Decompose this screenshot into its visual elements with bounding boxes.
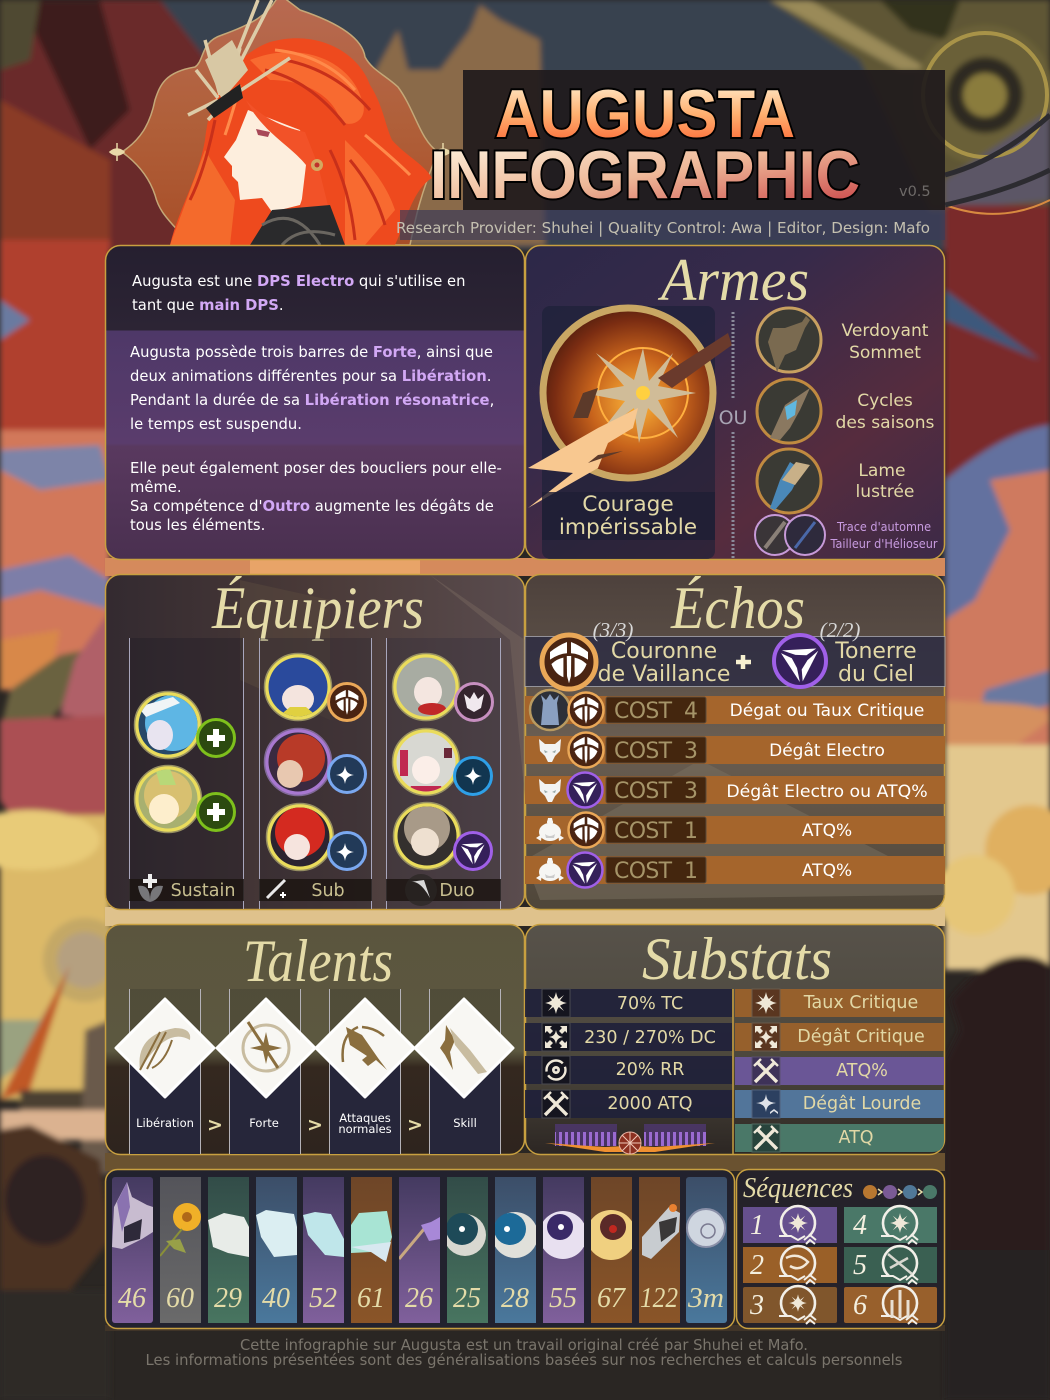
intro paragraph 2: deux animations différentes pour sa Libération. (130, 368, 491, 385)
echo row: cost 3 electro or atk: COST 3 (614, 779, 698, 804)
character portrait with support badge (264, 728, 366, 796)
priority: ATQ: ATQ (838, 1128, 874, 1148)
title line: INFOGRAPHIC: INFOGRAPHIC (430, 137, 860, 213)
material: 52 (303, 1177, 344, 1323)
character portrait with shield badge (264, 654, 366, 720)
weapon option: Verdoyant Sommet: Sommet (849, 343, 921, 363)
talent priority columns (129, 989, 500, 1154)
priority: Dégât Lourde (735, 1090, 944, 1118)
sequence 3 (743, 1286, 837, 1324)
priority: ATQ (735, 1124, 944, 1152)
heading: Armes: Armes (657, 247, 809, 313)
set: Couronne de Vaillance: de Vaillance (598, 662, 730, 687)
heading: Échos: Échos (670, 575, 805, 641)
echo row: cost 3 electro: COST 3 (614, 739, 698, 764)
weapon options: low rarity pair: Trace d'automne (836, 519, 931, 534)
target: crit damage (525, 1023, 732, 1051)
weapon option: Verdoyant Sommet: Verdoyant (841, 321, 929, 341)
echo row: cost 1 shield: ATQ% (802, 821, 852, 841)
panel: weapons (526, 246, 944, 560)
label: Sub (259, 879, 372, 901)
material: 40 (256, 1177, 297, 1323)
character portrait with purple badge (394, 802, 492, 870)
material: 28 (495, 1177, 536, 1323)
panel: teammates (106, 574, 525, 910)
talent icon: Attaques normales: Attaques (339, 1111, 391, 1125)
material: 60 (160, 1177, 201, 1323)
echo set header (525, 618, 945, 689)
priority: Taux Critique: Taux Critique (803, 993, 918, 1013)
material: 67: 67 (597, 1283, 626, 1314)
material: 55 (543, 1177, 584, 1323)
weapon option: Verdoyant Sommet (757, 308, 929, 372)
weapon option: Lame lustrée: lustrée (856, 482, 914, 502)
talent icon: Skill (415, 999, 513, 1130)
intro paragraph 2: Pendant la durée de sa Libération résonatrice, (130, 392, 494, 409)
talent icon: Attaques normales (316, 999, 414, 1136)
material: 61 (351, 1177, 392, 1323)
echo row: cost 1 thunder: ATQ% (802, 861, 852, 881)
set: Couronne de Vaillance: (3/3) (593, 618, 633, 642)
arrow: > (407, 1114, 423, 1136)
material: 28: 28 (501, 1283, 529, 1314)
sequence 1 (743, 1206, 837, 1244)
intro paragraph 3: même. (130, 479, 182, 496)
priority: ATQ%: ATQ% (836, 1061, 888, 1081)
material: 55: 55 (549, 1283, 577, 1314)
set: Tonerre du Ciel: Tonerre (834, 639, 917, 664)
echo row: cost 1 shield (525, 812, 945, 848)
talent icon: Forte (217, 999, 315, 1130)
character portrait with healer badge (134, 766, 234, 832)
set: Couronne de Vaillance (542, 618, 730, 689)
sequence 4: 4 (853, 1210, 867, 1241)
arrow: > (307, 1114, 323, 1136)
set: Couronne de Vaillance: Couronne (611, 639, 717, 664)
sequence 6: 6 (853, 1290, 867, 1321)
intro paragraph 3: Elle peut également poser des boucliers pour elle- (130, 460, 502, 477)
talent icon: Skill: Skill (453, 1116, 477, 1130)
weapon option: Cycles des saisons: des saisons (836, 413, 935, 433)
column: Duo (386, 638, 501, 909)
material: 3m credits: 3m (687, 1283, 724, 1314)
target: attack: 2000 ATQ (607, 1094, 693, 1114)
panel: talents (106, 924, 524, 1154)
sequence 6 (844, 1286, 937, 1324)
target: crit rate: 70% TC (617, 994, 683, 1014)
talent icon: Forte: Forte (249, 1116, 279, 1130)
echo row: cost 1 shield: COST 1 (614, 819, 698, 844)
material: 3m credits (686, 1177, 727, 1323)
weapon options: low rarity pair (755, 515, 938, 555)
material: 52: 52 (309, 1283, 337, 1314)
material: 46 (112, 1177, 153, 1323)
character portrait with pink badge (392, 654, 492, 720)
set: Tonerre du Ciel: du Ciel (838, 662, 914, 687)
weapon option: Lame lustrée: Lame (858, 461, 906, 481)
echo row: cost 3 electro or atk: Dégât Electro ou ATQ% (726, 782, 928, 802)
heading: Équipiers: Équipiers (211, 575, 424, 641)
panel: introduction (106, 246, 524, 560)
sequence 1: 1 (750, 1210, 764, 1241)
echo row: cost 4: COST 4 (614, 699, 698, 724)
sequence 4 (844, 1206, 937, 1244)
column: Sustain (129, 638, 244, 909)
version tag: v0.5 (899, 184, 931, 200)
plus sign (736, 655, 751, 669)
material: 122: 122 (640, 1283, 678, 1314)
material: 29 (208, 1177, 249, 1323)
credits line: Research Provider: Shuhei | Quality Control: Awa | Editor, Design: Mafo (396, 219, 930, 237)
intro paragraph 2: Augusta possède trois barres de Forte, ainsi que (130, 344, 493, 361)
footer disclaimer: Les informations présentées sont des généralisations basées sur nos recherches et calculs personnels (146, 1351, 903, 1369)
footer disclaimer (146, 1336, 903, 1369)
decoration: energy equaliser (545, 1124, 715, 1154)
label: Sustain: Sustain (171, 881, 235, 901)
priority: ATQ% (735, 1057, 944, 1085)
heading: Substats: Substats (642, 926, 832, 992)
material: 25 (444, 1177, 488, 1323)
echo row: cost 1 thunder: COST 1 (614, 859, 698, 884)
sequence 3: 3 (749, 1290, 764, 1321)
heading: Talents: Talents (243, 928, 393, 994)
label: Sustain (129, 874, 244, 902)
heading: Séquences: Séquences (743, 1172, 853, 1204)
priority: Dégât Lourde: Dégât Lourde (803, 1094, 921, 1114)
label: Duo (386, 874, 501, 906)
talent icon: Libération (116, 999, 214, 1130)
main weapon: Courage impérissable (528, 308, 732, 508)
material: 25: 25 (453, 1283, 481, 1314)
material: 26 (399, 1177, 440, 1323)
intro paragraph 2: le temps est suspendu. (130, 416, 302, 433)
echo row: cost 3 electro (525, 732, 945, 768)
talent icon: Libération: Libération (136, 1116, 194, 1130)
column: Sub (259, 638, 372, 909)
sequence 2 (743, 1246, 837, 1284)
weapon option: Lame lustrée (757, 449, 914, 513)
panel: echoes (525, 574, 945, 910)
talent icon: Attaques normales: normales (338, 1122, 392, 1136)
material: 40: 40 (262, 1283, 290, 1314)
intro paragraph 1: tant que main DPS. (132, 297, 284, 314)
title block (396, 70, 945, 240)
target: energy regen: 20% RR (616, 1060, 684, 1080)
footer disclaimer: Cette infographie sur Augusta est un travail original créé par Shuhei et Mafo. (240, 1336, 808, 1354)
panel: ascension materials (106, 1170, 734, 1328)
target: crit rate (525, 989, 732, 1017)
main weapon name (542, 492, 715, 540)
set: Tonerre du Ciel: (2/2) (820, 618, 860, 642)
character portrait with healer badge (134, 692, 234, 758)
sequence 2: 2 (750, 1250, 764, 1281)
sequence 5 (844, 1246, 937, 1284)
panel: sequences (736, 1170, 944, 1328)
echo row: cost 1 thunder (525, 852, 945, 888)
character portrait with support badge (266, 804, 366, 870)
sequence 5: 5 (853, 1250, 867, 1281)
material: 26: 26 (405, 1283, 433, 1314)
priority: Dégât Critique (735, 1023, 944, 1051)
main weapon name: impérissable (559, 515, 697, 540)
intro paragraph 3: Sa compétence d'Outro augmente les dégâts de (130, 498, 494, 515)
sequence priority colour key (863, 1185, 937, 1199)
main weapon name: Courage (582, 492, 674, 517)
set: Tonerre du Ciel (774, 618, 917, 687)
echo row: cost 3 electro or atk (525, 772, 945, 808)
character portrait with blue badge (392, 728, 492, 796)
echo row: cost 4: Dégat ou Taux Critique (730, 701, 924, 721)
target: attack (525, 1090, 732, 1118)
intro paragraph 1: Augusta est une DPS Electro qui s'utilise en (132, 273, 465, 290)
material: 61: 61 (357, 1283, 385, 1314)
title line: AUGUSTA: AUGUSTA (495, 76, 795, 152)
label: Duo: Duo (439, 881, 475, 901)
label: Sub: Sub (311, 881, 345, 901)
material: 46: 46 (118, 1283, 146, 1314)
echo row: cost 3 electro: Dégât Electro (769, 741, 885, 761)
divider: OU: OU (719, 407, 747, 429)
material: 122 (639, 1177, 680, 1323)
arrow: > (207, 1114, 223, 1136)
target: energy regen (525, 1056, 732, 1084)
target: crit damage: 230 / 270% DC (584, 1028, 716, 1048)
priority: Taux Critique (735, 989, 944, 1017)
material: 60: 60 (166, 1283, 194, 1314)
portrait: Augusta in ornate frame (110, 0, 450, 245)
material: 29: 29 (214, 1283, 242, 1314)
material: 67 (591, 1177, 632, 1323)
priority: Dégât Critique: Dégât Critique (797, 1027, 925, 1047)
panel: substats (525, 924, 944, 1155)
intro paragraph 3: tous les éléments. (130, 517, 265, 534)
echo row: cost 4 (525, 690, 945, 730)
weapon option: Cycles des saisons: Cycles (857, 391, 913, 411)
weapon options: low rarity pair: Tailleur d'Hélioseur (830, 536, 938, 551)
weapon option: Cycles des saisons (757, 379, 935, 443)
